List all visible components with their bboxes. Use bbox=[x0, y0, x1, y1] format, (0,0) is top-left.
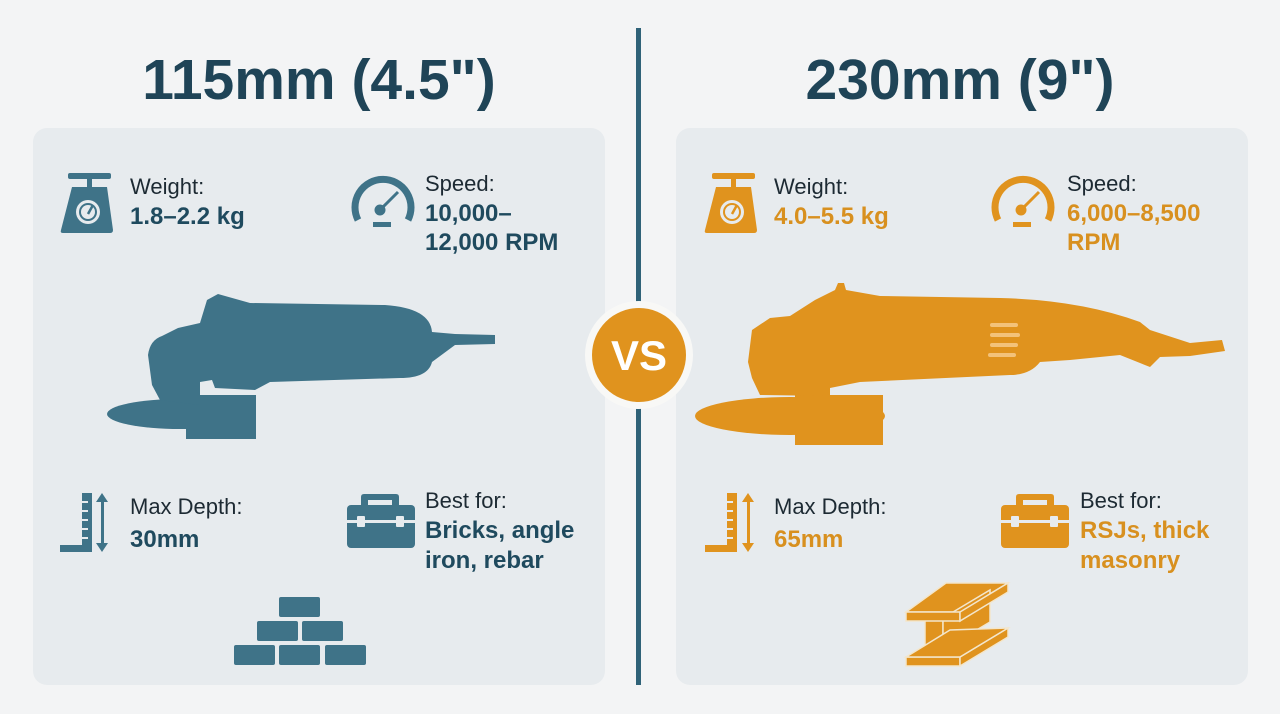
text: weight: 1.8–2.2 kg bbox=[130, 203, 245, 230]
icon: toolbox bbox=[1001, 494, 1069, 548]
text: best for: Best for: bbox=[1080, 488, 1162, 513]
text: best for: masonry bbox=[1080, 547, 1181, 574]
text: max depth bbox=[774, 494, 886, 553]
panel: 115mm bbox=[33, 48, 605, 685]
text: weight bbox=[130, 174, 245, 230]
VS badge bbox=[585, 301, 693, 409]
divider line bbox=[636, 28, 641, 685]
icon: gauge bbox=[355, 179, 411, 227]
panel: 230mm bbox=[676, 48, 1248, 685]
text: speed: RPM bbox=[1067, 229, 1120, 256]
text: best for: RSJs, thick bbox=[1080, 517, 1210, 544]
text: max depth: 30mm bbox=[130, 526, 199, 553]
text: speed: Speed: bbox=[425, 171, 495, 196]
icon: scale bbox=[705, 173, 757, 233]
text: speed: 6,000–8,500 bbox=[1067, 200, 1200, 227]
text: max depth bbox=[130, 494, 242, 553]
text: best for: Bricks, angle bbox=[425, 517, 574, 544]
text: max depth: 65mm bbox=[774, 526, 843, 553]
text: speed: 12,000 RPM bbox=[425, 229, 558, 256]
text: speed bbox=[425, 171, 558, 256]
text: weight bbox=[774, 174, 889, 230]
title: 115mm: 115mm (4.5") bbox=[142, 48, 496, 112]
title: 230mm: 230mm (9") bbox=[806, 48, 1114, 112]
icon: I-beam bbox=[906, 583, 1008, 666]
grinder silhouette large bbox=[695, 283, 1225, 445]
icon: bricks bbox=[234, 597, 366, 665]
text: best for: iron, rebar bbox=[425, 547, 544, 574]
grinder silhouette small bbox=[107, 294, 495, 439]
icon: depth ruler bbox=[60, 493, 108, 552]
icon: depth ruler bbox=[705, 493, 754, 552]
icon: toolbox bbox=[347, 494, 415, 548]
VS badge: VS bbox=[611, 332, 667, 379]
text: speed: Speed: bbox=[1067, 171, 1137, 196]
text: best for bbox=[425, 488, 574, 574]
text: best for bbox=[1080, 488, 1210, 574]
text: max depth: Max Depth: bbox=[774, 494, 886, 519]
icon: scale bbox=[61, 173, 113, 233]
icon: gauge bbox=[995, 179, 1051, 227]
text: max depth: Max Depth: bbox=[130, 494, 242, 519]
text: best for: Best for: bbox=[425, 488, 507, 513]
text: speed bbox=[1067, 171, 1200, 256]
text: weight: 4.0–5.5 kg bbox=[774, 203, 889, 230]
text: weight: Weight: bbox=[130, 174, 204, 199]
text: weight: Weight: bbox=[774, 174, 848, 199]
text: speed: 10,000– bbox=[425, 200, 512, 227]
